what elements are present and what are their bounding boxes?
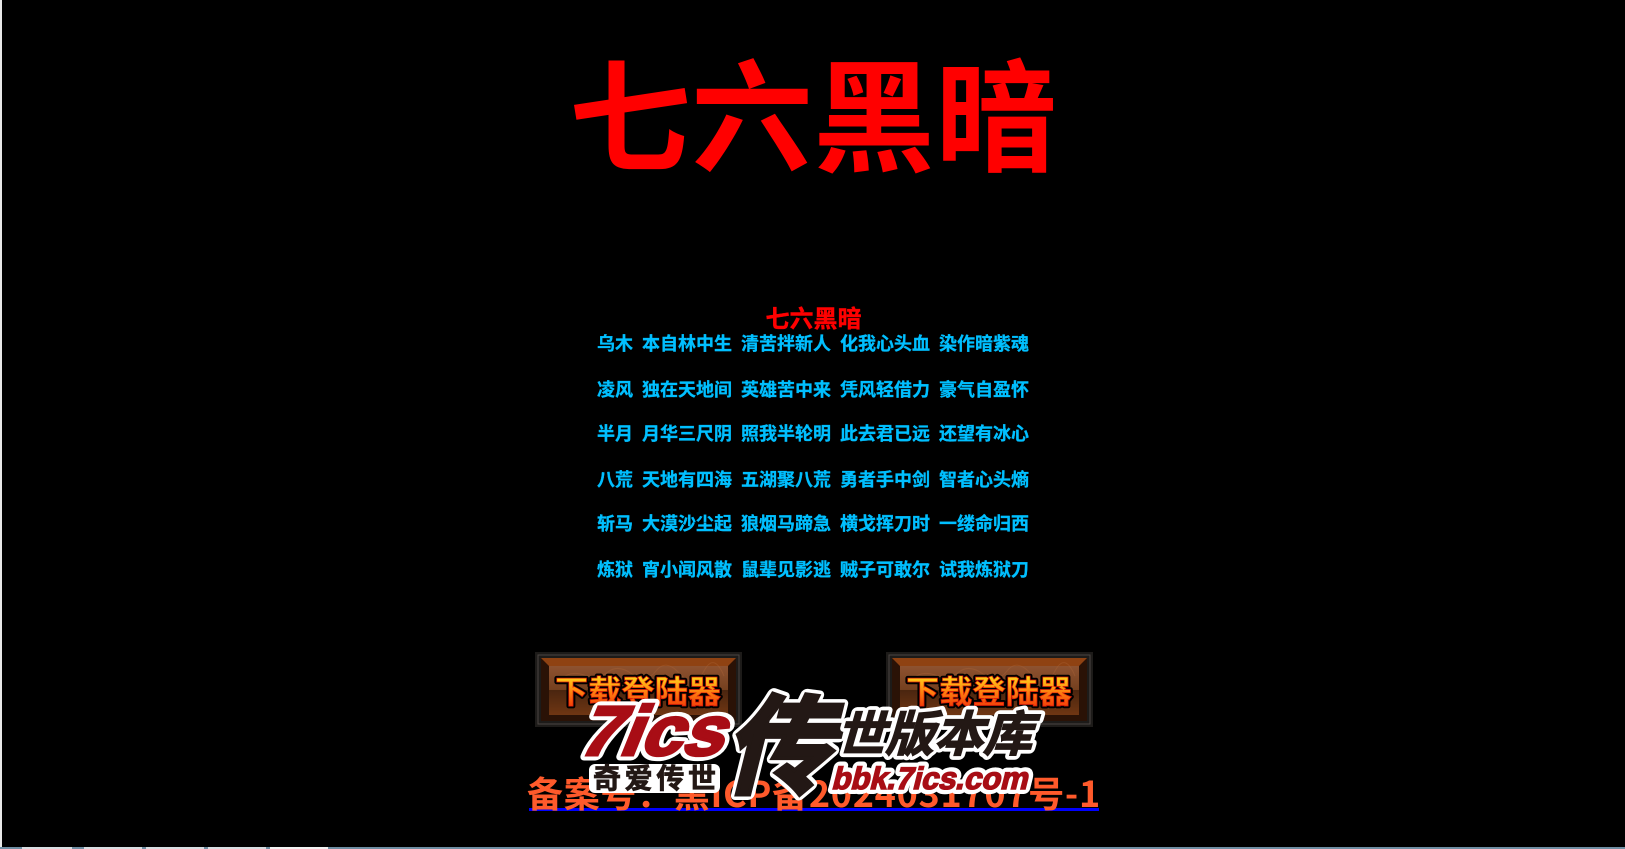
poem line 5: 大漠沙尘起 (642, 510, 732, 536)
taskbar strip (0, 847, 1625, 849)
button: right (886, 652, 1093, 727)
logo text: 奇爱传世: 奇爱传世 (593, 757, 716, 797)
poem line 3: 此去君已远 (840, 420, 930, 446)
poem line 2: 英雄苦中来 (741, 376, 831, 402)
button: left (535, 652, 742, 727)
button: right: 下载登陆器 (906, 667, 1072, 713)
logo text: 7ics: 7ics (570, 693, 746, 770)
title: 七六黑暗 (569, 21, 1057, 198)
poem line 3: 照我半轮明 (741, 420, 831, 446)
taskbar tabs (22, 847, 328, 849)
poem line 3 (597, 420, 1029, 446)
poem line 1: 清苦拌新人 (741, 330, 831, 356)
poem line 4: 勇者手中剑 (840, 466, 930, 492)
logo text: bbk.7ics.com: bbk.7ics.com (829, 761, 1034, 796)
logo (570, 680, 1048, 810)
button: right: 下载登陆器 (906, 667, 1072, 713)
poem line 2 (597, 376, 1029, 402)
poem line 3: 还望有冰心 (939, 420, 1029, 446)
poem line 6: 贼子可敢尔 (840, 556, 930, 582)
poem line 6 (597, 556, 1029, 582)
poem line 2: 凭风轻借力 (840, 376, 930, 402)
left window edge (0, 0, 2, 847)
logo text: 世版本库: 世版本库 (832, 696, 1048, 766)
poem line 5 (597, 510, 1029, 536)
poem line 4 (597, 466, 1029, 492)
poem line 1: 染作暗紫魂 (939, 330, 1029, 356)
poem line 1 (597, 330, 1029, 356)
poem line 3: 半月 (597, 420, 633, 446)
poem line 6: 宵小闻风散 (642, 556, 732, 582)
poem line 6: 炼狱 (597, 556, 633, 582)
poem line 1: 本自林中生 (642, 330, 732, 356)
logo text: 世版本库: 世版本库 (832, 696, 1048, 766)
logo text: 7ics: 7ics (570, 693, 746, 770)
poem line 4: 天地有四海 (642, 466, 732, 492)
poem line 2: 凌风 (597, 376, 633, 402)
button: left: 下载登陆器 (555, 667, 721, 713)
poem line 4: 八荒 (597, 466, 633, 492)
poem line 5: 斩马 (597, 510, 633, 536)
poem line 5: 横戈挥刀时 (840, 510, 930, 536)
poem line 6: 鼠辈见影逃 (741, 556, 831, 582)
poem line 2: 豪气自盈怀 (939, 376, 1029, 402)
poem heading: 七六黑暗 (766, 299, 862, 334)
poem line 2: 独在天地间 (642, 376, 732, 402)
poem line 3: 月华三尺阴 (642, 420, 732, 446)
logo text: bbk.7ics.com: bbk.7ics.com (829, 761, 1034, 796)
poem line 6: 试我炼狱刀 (939, 556, 1029, 582)
poem line 4: 五湖聚八荒 (741, 466, 831, 492)
download buttons (535, 652, 1093, 727)
poem line 1: 乌木 (597, 330, 633, 356)
poem line 5: 一缕命归西 (939, 510, 1029, 536)
footer underline (529, 808, 1099, 811)
filing number: 备案号：黑ICP备2024031707号-1 (527, 766, 1101, 818)
button: left: 下载登陆器 (555, 667, 721, 713)
poem line 4: 智者心头熵 (939, 466, 1029, 492)
poem line 5: 狼烟马蹄急 (741, 510, 831, 536)
poem line 1: 化我心头血 (840, 330, 930, 356)
